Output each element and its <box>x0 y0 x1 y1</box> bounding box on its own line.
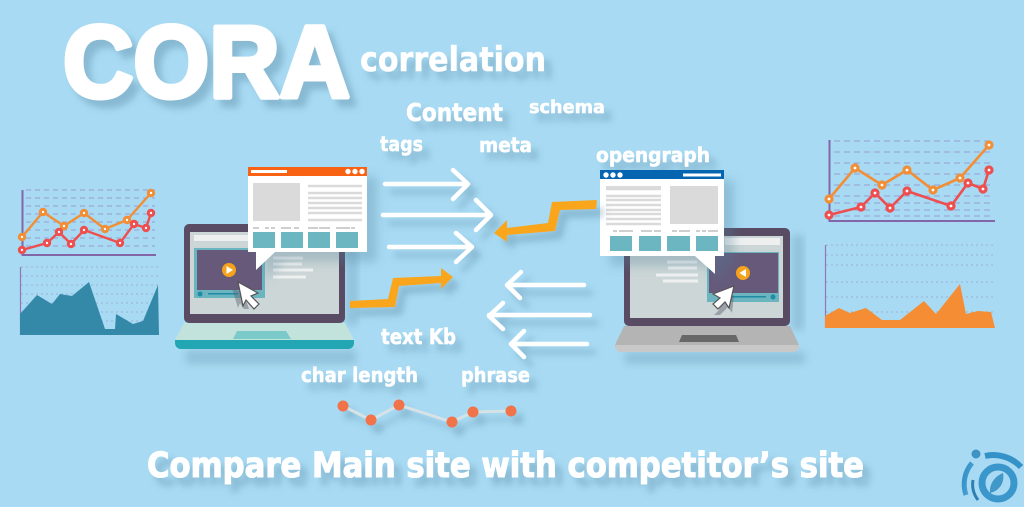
right area chart <box>825 245 995 328</box>
label: text Kb: text Kb <box>381 325 456 349</box>
icon: logo <box>964 450 1021 500</box>
video player <box>194 248 265 298</box>
label: tags: tags <box>380 132 423 156</box>
dotted trend line <box>338 400 516 428</box>
white arrows pointing left <box>489 272 590 357</box>
left line chart <box>19 190 156 255</box>
cursor <box>713 286 734 315</box>
video player <box>707 252 779 302</box>
subtitle: correlation: correlation <box>360 40 546 80</box>
label: meta: meta <box>479 133 532 157</box>
label: Content: Content <box>406 98 503 127</box>
label: char length: char length <box>301 363 418 387</box>
orange arrow: competitor site <box>494 200 597 242</box>
label: phrase: phrase <box>461 363 530 387</box>
left area chart <box>20 267 159 335</box>
white arrows pointing right <box>383 170 491 262</box>
bottom heading: Compare Main site with competitor’s site <box>147 446 864 486</box>
right line chart <box>826 140 995 221</box>
title: CORA: CORA <box>63 5 350 119</box>
left browser popup <box>248 167 367 270</box>
cursor <box>232 282 259 309</box>
right browser popup <box>600 170 724 274</box>
label: schema: schema <box>529 97 605 118</box>
right laptop <box>615 228 805 364</box>
left laptop <box>175 224 358 364</box>
orange arrow: main site <box>350 268 453 308</box>
label: opengraph: opengraph <box>596 143 710 167</box>
